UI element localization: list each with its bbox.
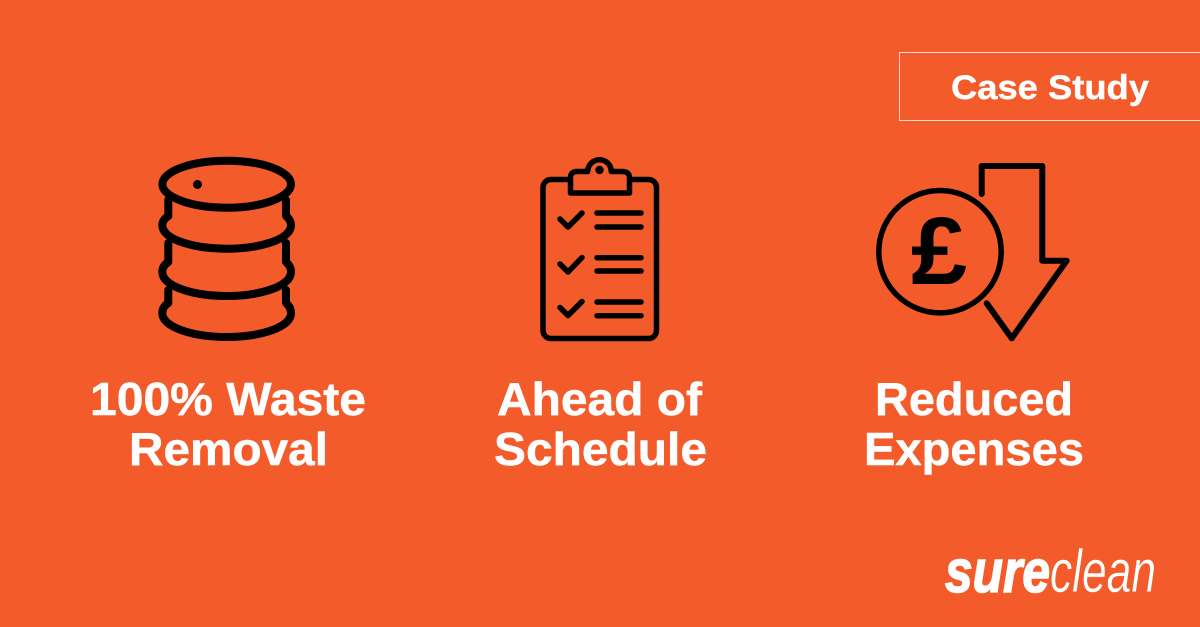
tag: case study: Case Study	[951, 69, 1149, 107]
label: 100% waste removal: Removal	[129, 423, 328, 475]
label: 100% waste removal: 100% Waste	[90, 373, 366, 425]
icon: clipboard checklist	[543, 160, 656, 338]
label: 100% waste removal	[90, 373, 366, 475]
label: ahead of schedule: Ahead of	[497, 373, 703, 425]
icon: pound coin with down arrow	[879, 166, 1067, 338]
icon: pound coin with down arrow: £	[908, 202, 969, 315]
icon: oil barrel	[162, 161, 291, 337]
logo: sureclean: sure	[945, 538, 1050, 605]
label: ahead of schedule: Schedule	[494, 423, 707, 475]
logo: sureclean: clean	[1050, 538, 1156, 605]
label: reduced expenses: Reduced	[875, 373, 1073, 425]
label: ahead of schedule	[494, 373, 707, 475]
logo: sureclean	[945, 538, 1156, 605]
label: reduced expenses	[864, 373, 1084, 475]
tag: case study	[900, 52, 1200, 120]
label: reduced expenses: Expenses	[864, 423, 1084, 475]
